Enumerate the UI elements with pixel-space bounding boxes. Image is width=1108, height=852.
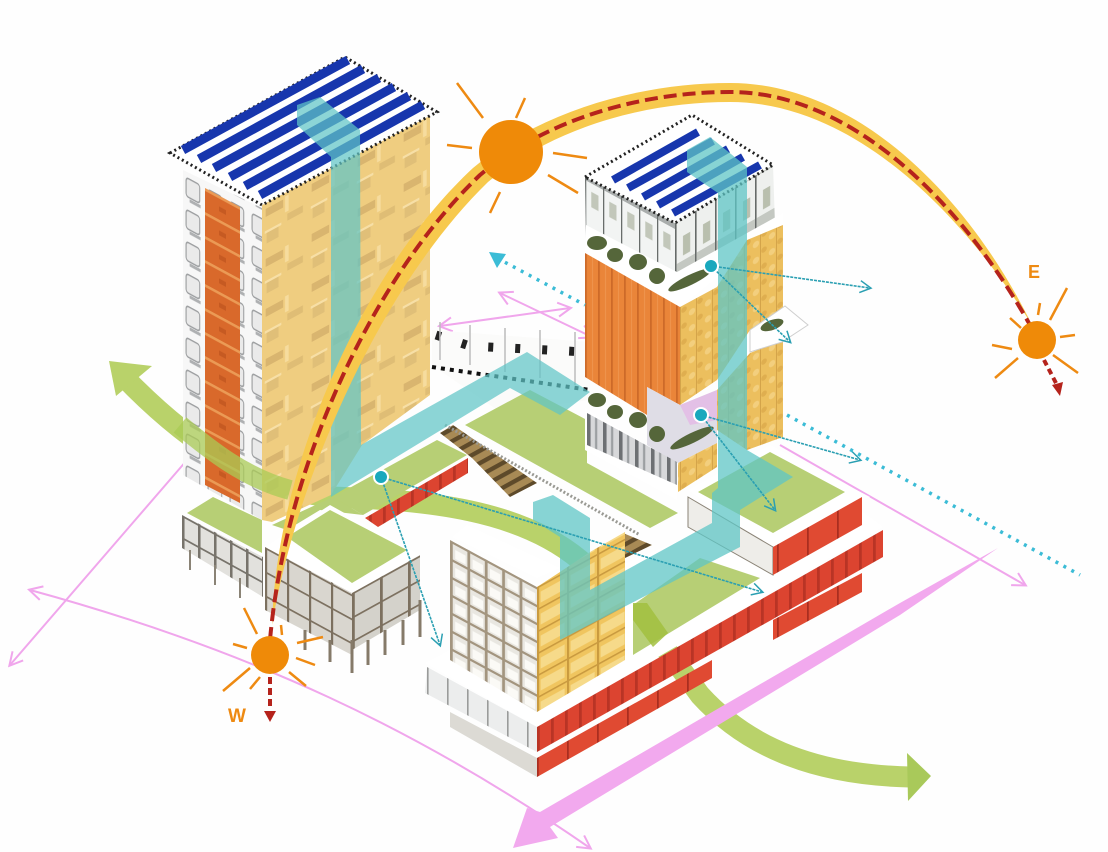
wind through slab lawn	[633, 603, 668, 647]
yellow facade upper	[680, 225, 783, 405]
wind overlay on left tower	[180, 425, 290, 490]
planting	[587, 236, 785, 453]
thin teal arrows	[381, 266, 870, 645]
right tower	[585, 115, 808, 500]
orange facade	[585, 253, 680, 415]
left tower roof	[170, 57, 437, 205]
mid level interior	[647, 387, 717, 463]
left tower solar panels	[183, 60, 423, 195]
slab lawn	[633, 558, 760, 655]
site boundary lines	[10, 293, 1025, 848]
dotted arrow head	[489, 252, 506, 268]
right tower roof	[585, 115, 773, 223]
lower facade	[585, 408, 677, 500]
wind flow arrow	[109, 361, 931, 801]
label: W: W	[228, 706, 246, 727]
left tower yellow face	[262, 115, 430, 522]
long slab	[425, 480, 883, 777]
teal nodes	[374, 259, 718, 484]
left tower left face	[183, 170, 262, 520]
slab red band	[537, 530, 883, 752]
teal solar flow, left	[297, 97, 590, 497]
front left block	[265, 505, 420, 673]
front building	[450, 525, 625, 712]
left podium roof and red band	[272, 440, 468, 530]
lower red band	[537, 660, 712, 777]
sunken stair	[440, 425, 652, 558]
terrace slab	[585, 213, 783, 307]
sun: midday	[447, 83, 587, 213]
slab grey end	[425, 667, 537, 752]
sun: west	[223, 608, 323, 727]
right upper block	[688, 445, 870, 575]
cyan dotted air flows	[497, 258, 1080, 575]
teal solar flow, right	[533, 137, 793, 640]
sun: east	[992, 262, 1078, 396]
label: E: E	[1028, 262, 1040, 282]
yellow facade lower	[717, 340, 783, 450]
plaza pergola	[432, 322, 590, 412]
upper glass level	[585, 177, 675, 292]
sun path arc	[270, 83, 1032, 640]
left tower	[170, 57, 437, 522]
side balcony	[750, 306, 808, 352]
lower grey band	[450, 712, 537, 777]
central plaza lawn	[465, 390, 678, 528]
large pink site arrow	[513, 548, 998, 848]
right tower solar panels	[613, 132, 760, 213]
podium: left rear block	[182, 497, 263, 598]
left tower orange strip	[205, 188, 240, 503]
